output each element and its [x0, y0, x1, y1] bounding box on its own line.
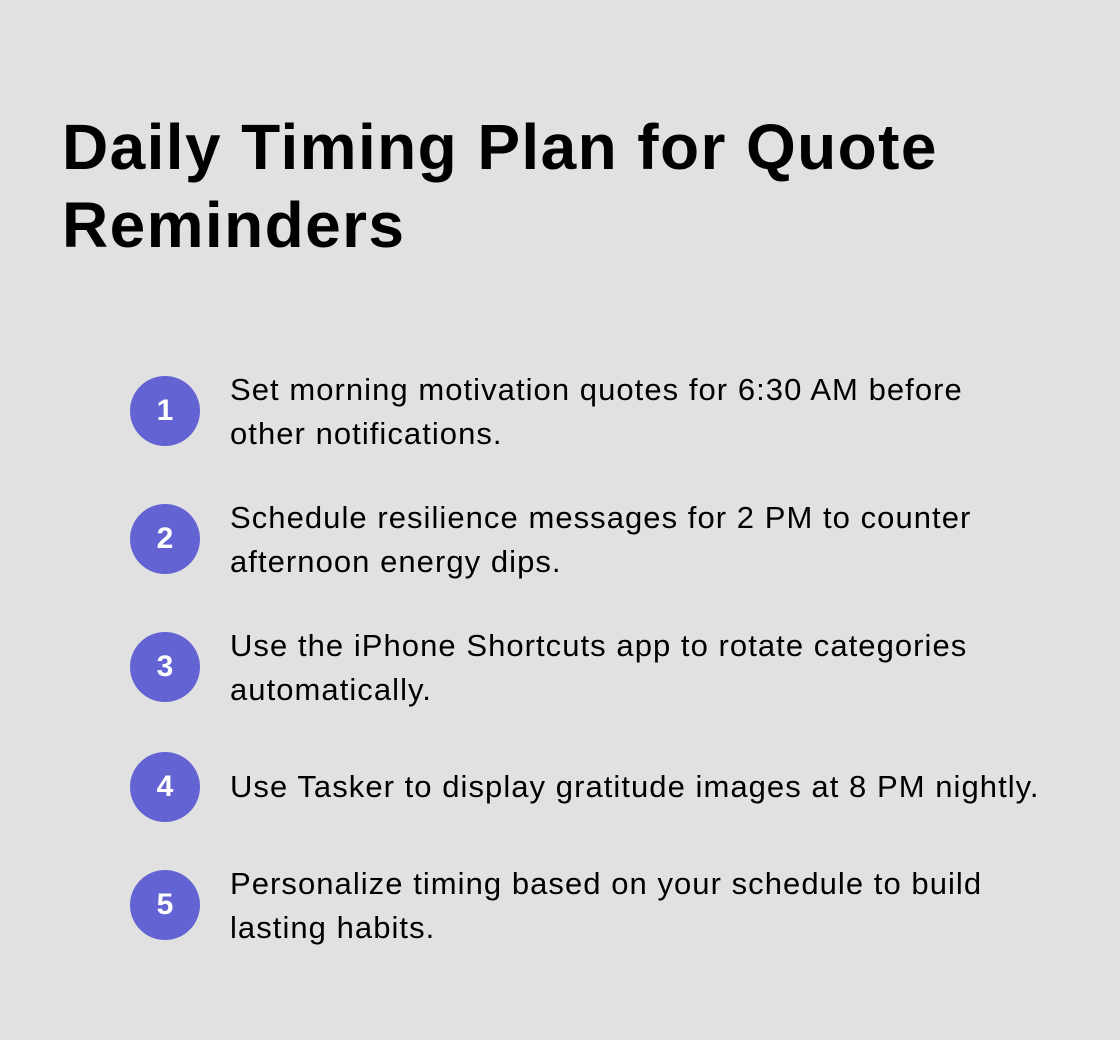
step 5: Personalize timing based on your schedule to build lasting habits.	[230, 866, 982, 945]
step 4: 4	[157, 770, 173, 803]
step 3: 3	[157, 650, 173, 683]
step 2: Schedule resilience messages for 2 PM to counter afternoon energy dips.	[230, 500, 971, 579]
step 2: 2	[157, 522, 173, 555]
step 4: Use Tasker to display gratitude images at 8 PM nightly.	[230, 769, 1040, 804]
step 1: Set morning motivation quotes for 6:30 AM before other notifications.	[230, 372, 963, 451]
step 3: Use the iPhone Shortcuts app to rotate categories automatically.	[230, 628, 967, 707]
step 4	[130, 752, 1040, 822]
step 5: 5	[157, 888, 173, 921]
title: Daily Timing Plan for Quote Reminders	[62, 111, 938, 261]
step 1: 1	[157, 394, 173, 427]
